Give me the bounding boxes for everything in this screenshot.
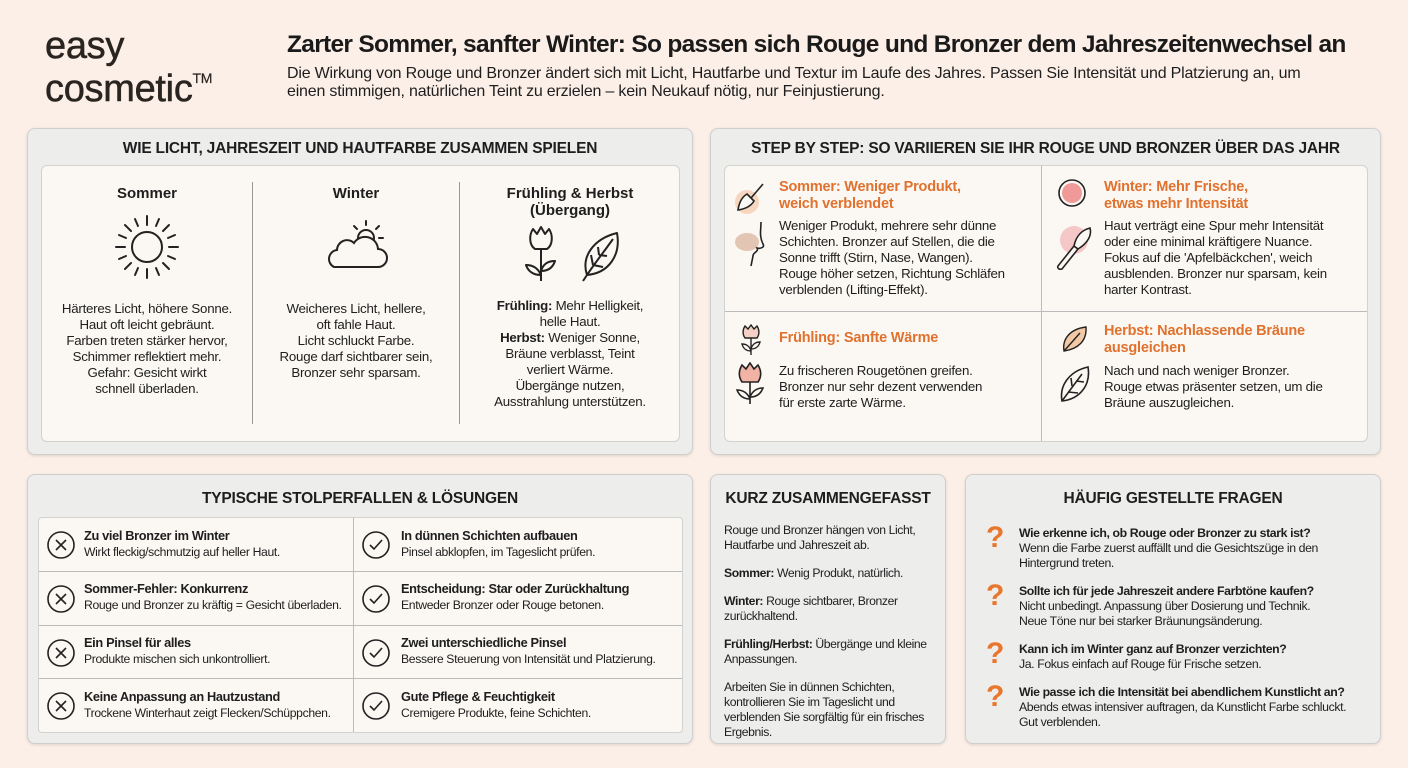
column: Winter: Licht schluckt Farbe. — [298, 333, 414, 348]
icon: tulip — [736, 362, 764, 404]
step: Herbst: ausgleichen — [1104, 340, 1186, 356]
faq 2 — [986, 579, 1314, 628]
column: Winter: Weicheres Licht, hellere, — [286, 301, 426, 316]
column: Sommer: schnell überladen. — [95, 381, 199, 396]
step: Herbst: Bräune auszugleichen. — [1104, 395, 1234, 410]
step: Sommer: weich verblendet — [779, 196, 893, 212]
icon: face profile — [735, 222, 764, 266]
row 2: Rouge und Bronzer zu kräftig = Gesicht überladen. — [84, 598, 342, 612]
column: Frühling & Herbst: (Übergang) — [530, 202, 610, 219]
logo: easy — [45, 25, 124, 67]
step: Winter: etwas mehr Intensität — [1104, 196, 1248, 212]
faq 1: Hintergrund treten. — [1019, 556, 1114, 570]
step: Sommer: Sommer: Weniger Produkt, — [779, 179, 961, 195]
faq 2: Neue Töne nur bei starker Bräunungsänderung. — [1019, 614, 1262, 628]
column: Winter: Rouge darf sichtbarer sein, — [280, 349, 432, 364]
column: Frühling & Herbst: verliert Wärme. — [527, 362, 613, 377]
column: Sommer: Sommer — [117, 185, 177, 202]
faq 2: Sollte ich für jede Jahreszeit andere Farbtöne kaufen? — [1019, 584, 1314, 598]
step: Winter: harter Kontrast. — [1104, 282, 1192, 297]
subtitle — [287, 65, 1300, 100]
column: Winter: Winter — [333, 185, 379, 202]
column: Sommer: Härteres Licht, höhere Sonne. — [62, 301, 232, 316]
logo: cosmeticTM — [45, 68, 212, 110]
icon: cloud with sun — [328, 220, 388, 268]
row 2: Sommer-Fehler: Konkurrenz — [84, 581, 248, 596]
subtitle: Die Wirkung von Rouge und Bronzer ändert sich mit Licht, Hautfarbe und Textur im Laufe des Jahres. Passen Sie Intensität und Platzierung an, um — [287, 65, 1300, 82]
row 4: Gute Pflege & Feuchtigkeit — [401, 689, 555, 704]
step: Herbst: Herbst: Nachlassende Bräune — [1104, 323, 1305, 339]
heading: WIE LICHT, JAHRESZEIT UND HAUTFARBE ZUSAMMEN SPIELEN — [123, 140, 597, 157]
step: Sommer: Schichten. Bronzer auf Stellen, die die — [779, 234, 995, 249]
step: Frühling: Frühling: Sanfte Wärme — [779, 330, 938, 346]
row 3: Bessere Steuerung von Intensität und Platzierung. — [401, 652, 656, 666]
faq 1: Wie erkenne ich, ob Rouge oder Bronzer zu stark ist? — [1019, 526, 1310, 540]
faq 3: Ja. Fokus einfach auf Rouge für Frische setzen. — [1019, 657, 1261, 671]
faq 3: ? — [986, 637, 1004, 670]
icon: small leaf — [1063, 326, 1087, 352]
faq 4: Abends etwas intensiver auftragen, da Kunstlicht Farbe schluckt. — [1019, 700, 1346, 714]
column: Frühling & Herbst: Bräune verblasst, Teint — [505, 346, 635, 361]
icon: blush brush — [1056, 226, 1092, 270]
summary text: Winter: Rouge sichtbarer, Bronzer zurückhaltend. — [724, 594, 898, 623]
panel: summary — [710, 474, 946, 744]
column: Frühling & Herbst: Herbst: Weniger Sonne, — [500, 330, 640, 345]
faq 4: ? — [986, 680, 1004, 713]
step: Frühling: Bronzer nur sehr dezent verwenden — [779, 379, 982, 394]
step: Winter: ausblenden. Bronzer nur sparsam, kein — [1104, 266, 1327, 281]
faq 4 — [986, 680, 1346, 729]
row 1: In dünnen Schichten aufbauen — [401, 528, 577, 543]
column: Sommer: Schimmer reflektiert mehr. — [73, 349, 221, 364]
title: Zarter Sommer, sanfter Winter: So passen sich Rouge und Bronzer dem Jahreszeitenwechsel an — [287, 31, 1346, 58]
row 4: Keine Anpassung an Hautzustand — [84, 689, 280, 704]
heading: KURZ ZUSAMMENGEFASST — [725, 490, 931, 507]
row 1: Wirkt fleckig/schmutzig auf heller Haut. — [84, 545, 280, 559]
summary text: Frühling/Herbst: Übergänge und kleine Anpassungen. — [724, 637, 927, 666]
step: Frühling — [736, 324, 982, 410]
heading: HÄUFIG GESTELLTE FRAGEN — [1064, 490, 1282, 507]
column: Winter: Bronzer sehr sparsam. — [291, 365, 421, 380]
icon: small tulip — [741, 324, 761, 355]
step: Sommer: verblenden (Lifting-Effekt). — [779, 282, 928, 297]
column: Frühling & Herbst: Frühling: Mehr Helligkeit, — [497, 298, 643, 313]
column: Frühling & Herbst: Frühling & Herbst — [507, 185, 633, 202]
panel: pitfalls & solutions — [27, 474, 693, 744]
heading: TYPISCHE STOLPERFALLEN & LÖSUNGEN — [202, 490, 518, 507]
column: Frühling & Herbst — [494, 185, 646, 409]
row 1 — [47, 528, 595, 559]
step: Sommer: Rouge höher setzen, Richtung Schläfen — [779, 266, 1005, 281]
icon: leaf outline — [1060, 366, 1090, 402]
column: Frühling & Herbst: Übergänge nutzen, — [516, 378, 624, 393]
step: Sommer: Weniger Produkt, mehrere sehr dünne — [779, 218, 996, 233]
icon: sun — [115, 215, 179, 279]
step: Frühling: für erste zarte Wärme. — [779, 395, 906, 410]
heading: STEP BY STEP: SO VARIIEREN SIE IHR ROUGE UND BRONZER ÜBER DAS JAHR — [751, 140, 1340, 157]
step: Winter: Haut verträgt eine Spur mehr Intensität — [1104, 218, 1323, 233]
summary text: Rouge und Bronzer hängen von Licht, Hautfarbe und Jahreszeit ab. — [724, 523, 915, 552]
step: Herbst: Nach und nach weniger Bronzer. — [1104, 363, 1289, 378]
row 2: Entscheidung: Star oder Zurückhaltung — [401, 581, 629, 596]
column: Sommer — [62, 185, 232, 396]
faq 4: Wie passe ich die Intensität bei abendlichem Kunstlicht an? — [1019, 685, 1344, 699]
column: Sommer: Gefahr: Gesicht wirkt — [88, 365, 206, 380]
row 4: Cremigere Produkte, feine Schichten. — [401, 706, 591, 720]
summary text: Arbeiten Sie in dünnen Schichten, kontrollieren Sie im Tageslicht und verblenden Sie sorgfältig für ein frisches Ergebnis. — [724, 680, 924, 739]
panel: step by step — [710, 128, 1381, 455]
faq 4: Gut verblenden. — [1019, 715, 1101, 729]
column: Frühling & Herbst: Ausstrahlung unterstützen. — [494, 394, 646, 409]
row 1: Zu viel Bronzer im Winter — [84, 528, 229, 543]
step: Sommer: Sonne trifft (Stirn, Nase, Wangen). — [779, 250, 973, 265]
icon: compact — [1058, 179, 1086, 207]
row 3: Zwei unterschiedliche Pinsel — [401, 635, 566, 650]
row 2 — [47, 581, 629, 613]
step: Winter: Fokus auf die 'Apfelbäckchen', weich — [1104, 250, 1312, 265]
faq 3: Kann ich im Winter ganz auf Bronzer verzichten? — [1019, 642, 1286, 656]
step: Frühling: Zu frischeren Rougetönen greifen. — [779, 363, 973, 378]
logo — [45, 25, 212, 110]
column: Frühling & Herbst: helle Haut. — [540, 314, 600, 329]
step: Winter: oder eine minimal kräftigere Nuance. — [1104, 234, 1312, 249]
faq 3 — [986, 637, 1286, 671]
row 3: Produkte mischen sich unkontrolliert. — [84, 652, 270, 666]
faq 1: Wenn die Farbe zuerst auffällt und die Gesichtszüge in den — [1019, 541, 1318, 555]
step: Sommer — [735, 179, 1005, 297]
step: Winter — [1056, 179, 1327, 297]
faq 2: ? — [986, 579, 1004, 612]
row 3: Ein Pinsel für alles — [84, 635, 191, 650]
summary text — [724, 523, 927, 739]
panel: FAQ — [965, 474, 1381, 744]
column: Winter — [280, 185, 432, 380]
faq 1: ? — [986, 521, 1004, 554]
faq 2: Nicht unbedingt. Anpassung über Dosierung und Technik. — [1019, 599, 1310, 613]
row 2: Entweder Bronzer oder Rouge betonen. — [401, 598, 604, 612]
row 1: Pinsel abklopfen, im Tageslicht prüfen. — [401, 545, 595, 559]
step: Herbst — [1060, 323, 1323, 410]
table — [38, 517, 683, 733]
faq 1 — [986, 521, 1318, 570]
icon: brush — [735, 184, 764, 214]
step: Herbst: Rouge etwas präsenter setzen, um die — [1104, 379, 1323, 394]
card: four seasons grid — [724, 165, 1368, 442]
card: three seasons — [41, 165, 680, 442]
step: Winter: Winter: Mehr Frische, — [1104, 179, 1248, 195]
column: Sommer: Haut oft leicht gebräunt. — [80, 317, 214, 332]
panel: light and season — [27, 128, 693, 455]
row 4: Trockene Winterhaut zeigt Flecken/Schüppchen. — [84, 706, 331, 720]
summary text: Sommer: Wenig Produkt, natürlich. — [724, 566, 903, 580]
subtitle: einen stimmigen, natürlichen Teint zu erzielen – kein Neukauf nötig, nur Feinjustierung. — [287, 83, 885, 100]
column: Sommer: Farben treten stärker hervor, — [66, 333, 228, 348]
row 3 — [47, 635, 656, 667]
row 4 — [47, 689, 591, 720]
icon: tulip and leaf — [525, 226, 619, 282]
column: Winter: oft fahle Haut. — [316, 317, 396, 332]
